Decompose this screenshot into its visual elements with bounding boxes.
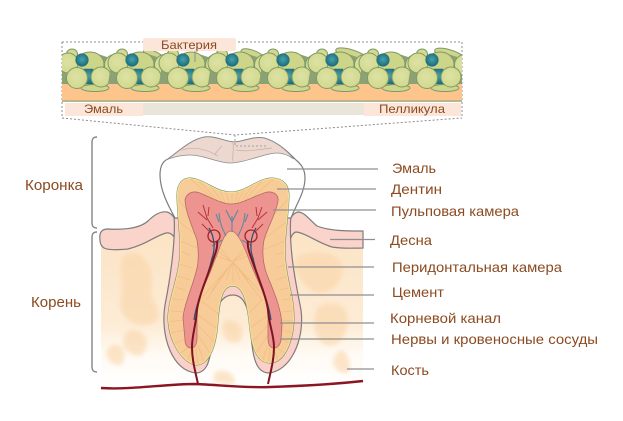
enamel crown <box>160 137 305 218</box>
leader lines <box>273 169 378 369</box>
blood vessels in canals <box>192 241 274 384</box>
orange enamel band <box>62 82 462 100</box>
bacteria clusters <box>62 47 462 92</box>
label: Корневой канал: Корневой канал <box>390 310 501 326</box>
bone <box>101 230 363 385</box>
infographic: tooth anatomy <box>26 38 597 390</box>
root outer layer: periodontal <box>164 215 302 373</box>
label: Коронка: Коронка <box>25 178 84 194</box>
label strip <box>143 103 364 115</box>
label: Корень: Корень <box>31 295 81 311</box>
label: Десна: Десна <box>390 232 432 248</box>
nerves: blue branches <box>194 210 271 320</box>
enamel cap <box>168 137 294 163</box>
pulp chamber and root canals <box>183 192 282 348</box>
label: Кость: Кость <box>391 362 429 378</box>
vessels: red branches <box>198 205 267 242</box>
label: Пульповая камера: Пульповая камера <box>391 203 519 219</box>
main blood vessel <box>101 381 363 388</box>
bracket: crown <box>92 137 97 228</box>
label: Цемент: Цемент <box>392 284 445 300</box>
dotted magnifier frame <box>62 42 462 135</box>
dentin tubules <box>168 178 294 365</box>
label: Перидонтальная камера: Перидонтальная камера <box>392 259 562 275</box>
label: Эмаль: Эмаль <box>84 102 123 116</box>
label: Пелликула: Пелликула <box>379 102 445 116</box>
pellicle line <box>62 100 462 102</box>
gum <box>100 212 363 250</box>
panel: enlarged enamel surface <box>62 38 462 136</box>
label: Нервы и кровеносные сосуды: Нервы и кровеносные сосуды <box>391 331 598 347</box>
label: Бактерия: Бактерия <box>161 38 217 52</box>
label: Дентин: Дентин <box>391 181 442 197</box>
cap fissures <box>182 143 272 161</box>
label: Бактерия <box>143 38 236 62</box>
bracket: root <box>92 232 97 372</box>
label: Эмаль: Эмаль <box>392 160 436 176</box>
